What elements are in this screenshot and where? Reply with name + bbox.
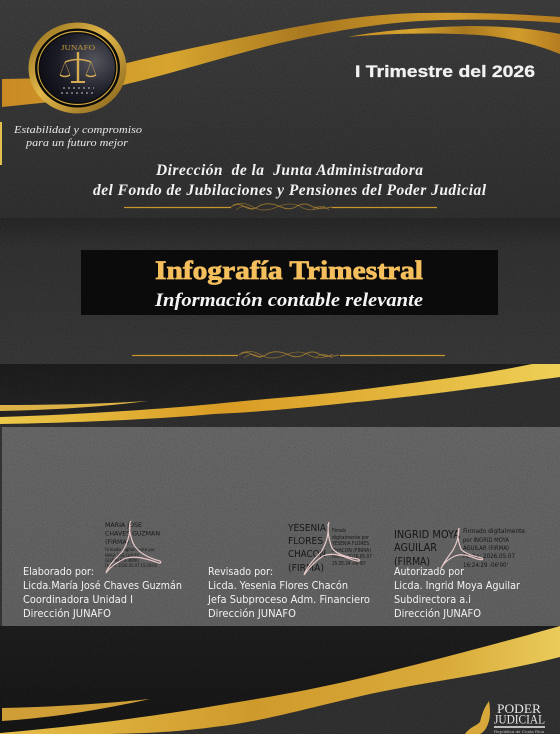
icon: signature mark <box>441 528 483 569</box>
signature: Maria Jose Chaves: GUZMAN (FIRMA) <box>105 558 139 563</box>
signature: Ingrid Moya: por INGRID MOYA <box>463 537 510 544</box>
ornament divider lower <box>132 351 445 358</box>
signature: Maria Jose Chaves: MARIA JOSE CHAVES <box>105 553 139 558</box>
heading: directorate: Dirección de la Junta Administradora <box>155 162 423 179</box>
signature: Ingrid Moya: (FIRMA) <box>394 556 430 568</box>
tagline: para un futuro mejor <box>25 137 129 149</box>
signature: Ingrid Moya: INGRID MOYA <box>394 529 461 541</box>
signature: Ingrid Moya: Firmado digitalmente <box>463 528 525 535</box>
credits: authorized by: Licda. Ingrid Moya Aguilar <box>394 580 521 592</box>
credits: prepared by: Dirección JUNAFO <box>23 608 111 620</box>
credits: authorized by: Subdirectora a.i <box>394 594 471 606</box>
top inner gold swoosh <box>348 26 560 54</box>
credits: authorized by <box>394 566 521 620</box>
logo lower dots <box>61 88 94 93</box>
bottom small swoosh <box>2 699 150 721</box>
heading: directorate <box>93 162 487 199</box>
signature: Yesenia Flores: FLORES <box>288 536 323 547</box>
background: lower section <box>0 626 560 734</box>
signature: Yesenia Flores: CHACON <box>288 549 326 560</box>
middle small swoosh <box>0 401 148 411</box>
logo name: JUNAFO <box>61 43 96 52</box>
logo: JUNAFO seal <box>28 22 126 114</box>
left edge accent <box>0 122 2 165</box>
logo: Poder Judicial <box>465 701 545 734</box>
signature: Yesenia Flores: 15:35:24 -06'00' <box>332 561 366 567</box>
signature: Yesenia Flores: YESENIA <box>287 523 326 534</box>
credits: reviewed by <box>207 566 370 620</box>
credits: authorized by: Dirección JUNAFO <box>394 608 481 620</box>
logo: Poder Judicial: JUDICIAL <box>494 712 545 726</box>
heading: directorate: del Fondo de Jubilaciones y Pensiones del Poder Judicial <box>93 182 487 199</box>
signature: Yesenia Flores: digitalmente por <box>332 535 370 541</box>
signature: Yesenia Flores: Firmado <box>332 528 346 534</box>
signature: Maria Jose Chaves <box>105 521 161 573</box>
credits: reviewed by: Dirección JUNAFO <box>208 608 296 620</box>
period label: I Trimestre del 2026 <box>355 62 535 81</box>
credits: reviewed by: Jefa Subproceso Adm. Financiero <box>207 594 370 606</box>
background: swoosh band <box>0 364 560 427</box>
title: Infografía Trimestral <box>155 256 423 285</box>
credits: prepared by <box>23 566 182 620</box>
credits: reviewed by: Licda. Yesenia Flores Chacón <box>208 580 348 592</box>
logo wordmark: PODER <box>497 702 542 716</box>
signature: Ingrid Moya: 16:24:29 -06'00' <box>463 562 508 569</box>
subtitle: Información contable relevante <box>154 290 424 311</box>
credits: reviewed by: Revisado por: <box>208 566 273 578</box>
logo: Poder Judicial: República de Costa Rica <box>494 730 544 734</box>
icon: signature mark <box>106 521 161 573</box>
signature: Yesenia Flores: YESENIA FLORES <box>331 541 369 547</box>
signature: Yesenia Flores: CHACON (FIRMA) <box>332 548 371 554</box>
background: middle section <box>0 218 560 364</box>
middle gold swoosh <box>0 364 560 424</box>
credits: prepared by: Licda.María José Chaves Guzmán <box>23 580 182 592</box>
icon: signature mark <box>304 522 360 575</box>
signature: Ingrid Moya: AGUILAR (FIRMA) <box>463 545 509 552</box>
signature: Ingrid Moya: AGUILAR <box>394 542 437 554</box>
tagline <box>13 124 143 149</box>
signature: Yesenia Flores: (FIRMA) <box>288 563 324 574</box>
panel: signatures <box>2 427 560 626</box>
background: upper section <box>0 0 560 218</box>
credits: authorized by: Autorizado por <box>394 566 465 578</box>
ornament divider upper <box>124 203 437 210</box>
signature: Ingrid Moya <box>394 528 525 569</box>
signature: Yesenia Flores <box>287 522 372 575</box>
background: lower right wedge <box>90 657 560 734</box>
tagline: Estabilidad y compromiso <box>13 124 143 136</box>
signature: Ingrid Moya: Fecha: 2026.05.07 <box>463 553 515 560</box>
signature: Maria Jose Chaves: MARIA JOSE <box>105 521 142 529</box>
top gold swoosh <box>2 13 560 107</box>
signature: Maria Jose Chaves: Firmado digitalmente por <box>105 547 155 552</box>
icon: scales <box>60 52 96 82</box>
background: band lower wedge <box>0 377 560 427</box>
credits: prepared by: Elaborado por: <box>23 566 94 578</box>
signature: Maria Jose Chaves: CHAVES GUZMAN <box>105 530 160 538</box>
credits: prepared by: Coordinadora Unidad I <box>23 594 133 606</box>
signature: Maria Jose Chaves: (FIRMA) <box>105 538 129 546</box>
icon: gold figure <box>465 701 490 734</box>
title box <box>81 250 498 315</box>
signature: Yesenia Flores: Fecha: 2026.05.07 <box>332 554 372 560</box>
signature: Maria Jose Chaves: Fecha: 2026.05.07 15:20:03 <box>105 563 157 568</box>
bottom gold swoosh <box>0 626 560 734</box>
